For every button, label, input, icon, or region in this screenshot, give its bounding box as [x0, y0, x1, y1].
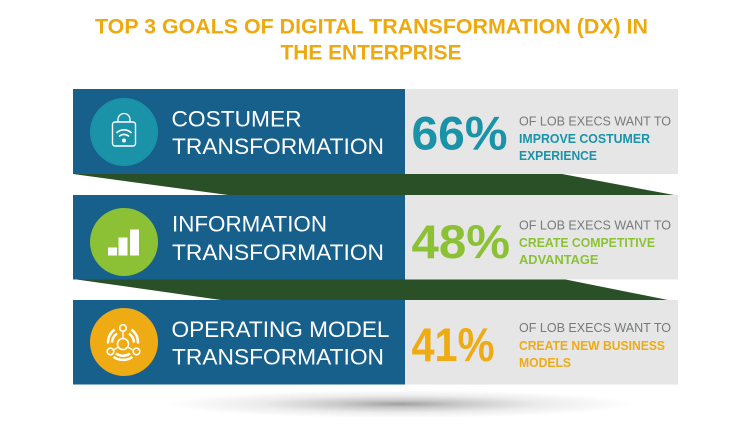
icon: operating network [90, 308, 158, 376]
panel: costumer transformation [73, 89, 678, 174]
stat description: information: OF LOB EXECS WANT TO [519, 218, 671, 232]
stat description: costumer: EXPERIENCE [519, 148, 597, 163]
heading: information transformation: TRANSFORMATION [172, 240, 384, 265]
stat background: information [405, 195, 678, 280]
heading: costumer transformation: COSTUMER [172, 106, 302, 132]
panel background: information [73, 195, 405, 280]
stat background: costumer [405, 89, 678, 174]
stat description: operating model [519, 320, 671, 370]
panel: operating model transformation [73, 300, 678, 384]
stat background: operating model [405, 300, 678, 384]
heading: costumer transformation [172, 106, 384, 159]
stat description: operating model: MODELS [519, 355, 571, 370]
stat description: information [519, 218, 671, 267]
connector band 2 [73, 279, 668, 300]
icon: shopping bag with wifi [90, 98, 158, 166]
stat: 41%: 41% [412, 319, 494, 372]
stat description: information: CREATE COMPETITIVE [519, 235, 655, 250]
panel background: operating model [73, 300, 405, 384]
title [95, 16, 648, 64]
title: TOP 3 GOALS OF DIGITAL TRANSFORMATION (DX) IN [95, 16, 648, 38]
stat description: costumer: OF LOB EXECS WANT TO [519, 114, 671, 128]
stat description: costumer [519, 114, 671, 163]
ground shadow [165, 390, 635, 418]
heading: operating model transformation [172, 317, 390, 370]
heading: costumer transformation: TRANSFORMATION [172, 134, 384, 159]
stat: 48%: 48% [412, 216, 510, 269]
stat description: costumer: IMPROVE COSTUMER [519, 131, 651, 146]
panel background: costumer [73, 89, 405, 174]
connector band 1 [73, 174, 674, 195]
panel: information transformation [73, 195, 678, 280]
stat description: information: ADVANTAGE [519, 252, 599, 267]
title: THE ENTERPRISE [280, 42, 462, 64]
stat description: operating model: CREATE NEW BUSINESS [519, 338, 665, 353]
heading: operating model transformation: OPERATING MODEL [172, 317, 390, 342]
heading: information transformation [172, 212, 384, 265]
heading: information transformation: INFORMATION [172, 212, 327, 236]
stat: 66%: 66% [412, 108, 508, 160]
heading: operating model transformation: TRANSFORMATION [172, 344, 384, 370]
icon: bar chart [90, 208, 158, 276]
stat description: operating model: OF LOB EXECS WANT TO [519, 320, 671, 335]
